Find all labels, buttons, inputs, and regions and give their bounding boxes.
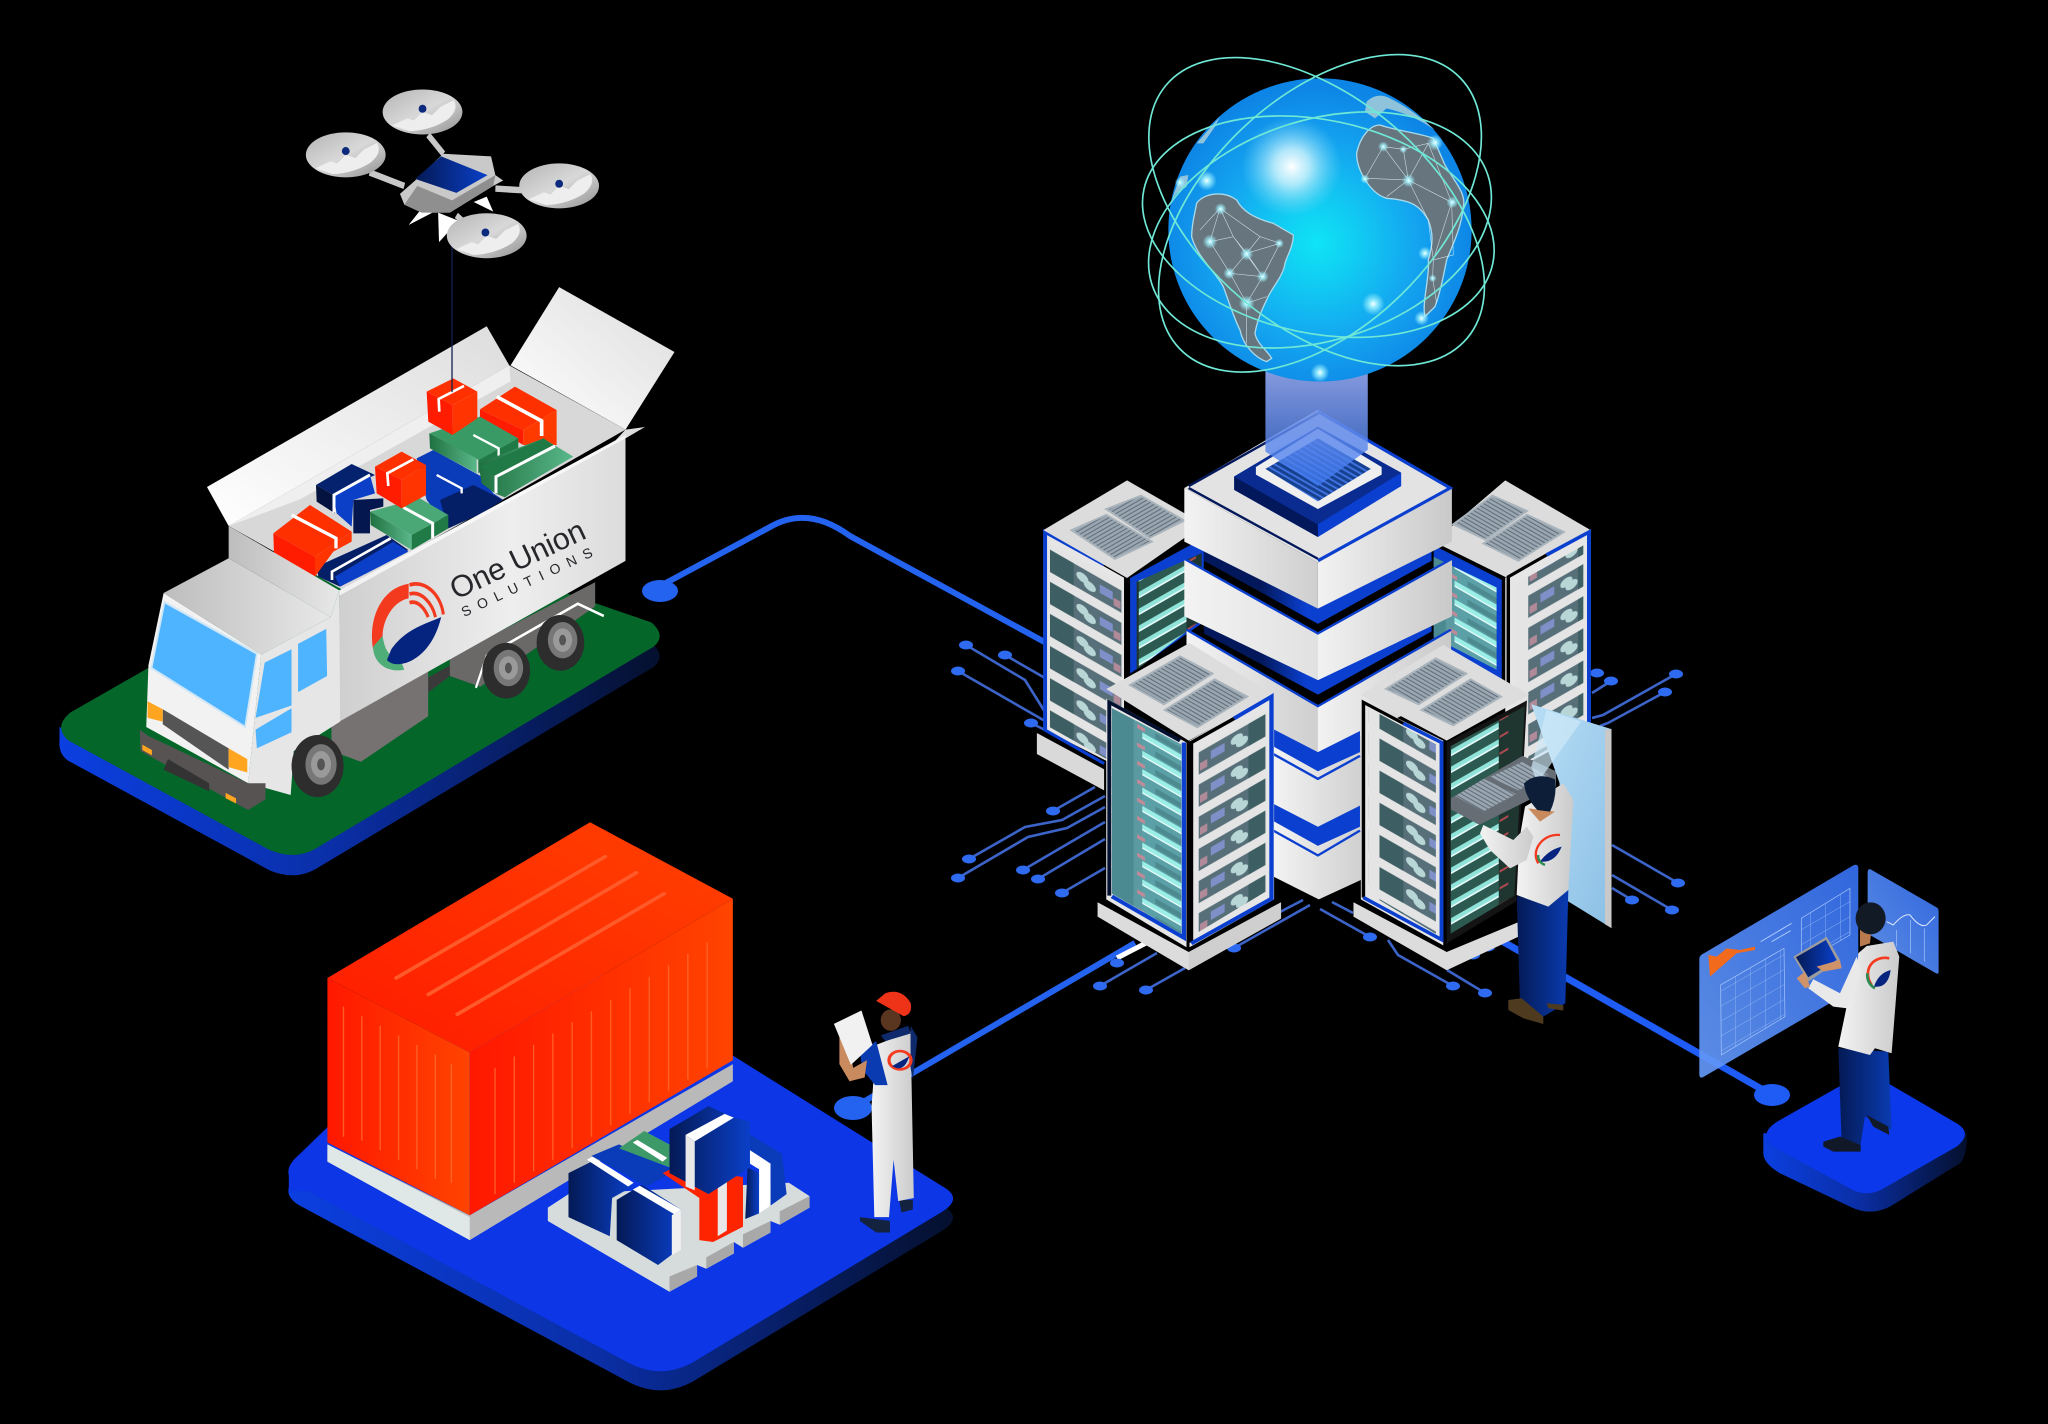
analyst dashboard screens bbox=[1699, 865, 1939, 1078]
analyst with tablet bbox=[1793, 902, 1899, 1152]
glass door bbox=[1531, 704, 1612, 928]
tower top vent bbox=[1234, 427, 1401, 537]
drone arms bbox=[370, 135, 521, 231]
truck cargo body bbox=[229, 435, 625, 722]
orbit rings bbox=[1092, 0, 1541, 431]
drone skids bbox=[409, 197, 493, 242]
connector: container to data centre bbox=[834, 942, 1148, 1120]
technician hair bbox=[1524, 776, 1556, 812]
large screen bbox=[1699, 865, 1858, 1078]
front-left server rack bbox=[1098, 643, 1281, 970]
continents bbox=[1172, 96, 1464, 362]
analyst tablet bbox=[1793, 937, 1842, 988]
cargo flaps bbox=[207, 287, 675, 590]
logo wordmark: SOLUTIONS bbox=[459, 541, 602, 620]
data centre bbox=[1037, 364, 1612, 970]
technician shirt bbox=[1480, 783, 1573, 907]
drone bbox=[306, 89, 599, 392]
connector: data centre to analyst bbox=[1500, 940, 1790, 1106]
truck chassis and rear wheels bbox=[331, 582, 604, 762]
pulled-out server tray bbox=[1451, 756, 1556, 825]
container scene bbox=[288, 822, 953, 1390]
light beam bbox=[1265, 364, 1368, 486]
connector: truck to data centre bbox=[642, 518, 1050, 645]
network nodes bbox=[1175, 135, 1458, 382]
small screen bbox=[1868, 869, 1939, 974]
technician at server bbox=[1480, 776, 1573, 1024]
worker with clipboard bbox=[834, 992, 917, 1232]
globe sphere bbox=[1168, 78, 1472, 382]
globe bbox=[1092, 0, 1541, 431]
circuit traces around data centre bbox=[951, 640, 1685, 998]
cargo boxes bbox=[273, 378, 573, 587]
technician trousers bbox=[1517, 890, 1568, 1017]
green platform bbox=[59, 531, 660, 875]
analyst shoes bbox=[1823, 1115, 1889, 1152]
logo wordmark: One Union bbox=[444, 513, 591, 606]
blue platform bbox=[288, 953, 953, 1390]
truck cab bbox=[140, 558, 340, 810]
truck scene bbox=[59, 287, 675, 875]
red shipping container bbox=[327, 822, 733, 1215]
analyst coat bbox=[1808, 942, 1899, 1055]
back-left server rack bbox=[1037, 480, 1204, 790]
analyst platform bbox=[1763, 1073, 1967, 1212]
pallet with boxes bbox=[548, 1106, 810, 1292]
truck front wheel bbox=[292, 735, 344, 797]
front-right server rack bbox=[1353, 645, 1529, 970]
company logo on truck bbox=[372, 584, 443, 670]
technician boots bbox=[1508, 998, 1563, 1024]
central tower bbox=[1184, 410, 1452, 899]
analyst trousers bbox=[1838, 1048, 1892, 1148]
analyst head bbox=[1856, 902, 1886, 947]
container base bbox=[327, 1064, 733, 1240]
drone rotors bbox=[306, 89, 599, 258]
back-right server rack bbox=[1434, 480, 1591, 775]
drone body bbox=[400, 154, 503, 213]
